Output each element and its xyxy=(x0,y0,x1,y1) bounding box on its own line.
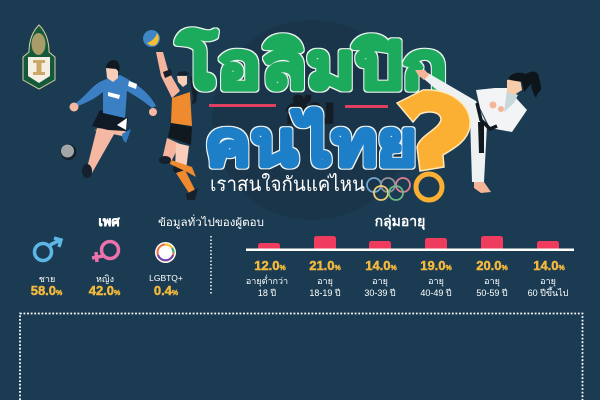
age range labels: 18-19 ปี xyxy=(309,288,341,298)
age value labels: 20.0% xyxy=(476,258,509,273)
heading: respondent info: ข้อมูลทั่วไปของผู้ตอบ xyxy=(158,214,264,229)
age range labels: 18 ปี xyxy=(258,288,276,298)
label: male xyxy=(31,274,63,298)
age range labels: อายุ xyxy=(540,276,556,287)
title line: Olympic: โอลิมปิก xyxy=(176,28,447,102)
age range labels: 50-59 ปี xyxy=(476,288,508,298)
label: female: หญิง xyxy=(96,274,114,284)
age value labels: 19.0% xyxy=(420,258,453,273)
label: LGBTQ: 0.4% xyxy=(154,283,179,298)
subtitle: เราสนใจกันแค่ไหน xyxy=(210,173,365,196)
age value labels: 14.0% xyxy=(533,258,566,273)
title xyxy=(176,28,447,196)
age value labels: 12.0% xyxy=(254,258,287,273)
label: female: 42.0% xyxy=(89,283,121,298)
age range labels: อายุ xyxy=(484,276,500,287)
age range labels: 60 ปีขึ้นไป xyxy=(528,286,569,298)
illustration: volleyball player xyxy=(143,30,198,200)
age value labels: 21.0% xyxy=(309,258,342,273)
age range labels: อายุ xyxy=(428,276,444,287)
illustration: taekwondo kicker xyxy=(415,70,541,193)
icon: LGBTQ ring xyxy=(155,242,176,263)
icon: female xyxy=(92,242,118,262)
title line: Thai people: คนไทย xyxy=(205,108,417,179)
label: LGBTQ xyxy=(149,273,183,298)
age value labels xyxy=(254,258,566,273)
illustration: football player xyxy=(60,60,157,178)
dotted empty panel xyxy=(20,314,582,400)
age range labels: อายุ xyxy=(372,276,388,287)
age range labels: 40-49 ปี xyxy=(420,288,452,298)
label: male: 58.0% xyxy=(31,283,63,298)
olympic rings xyxy=(367,178,410,200)
age range labels xyxy=(246,274,569,298)
age value labels: 14.0% xyxy=(365,258,398,273)
age range labels: อายุต่ำกว่า xyxy=(246,274,288,287)
heading: gender: เพศ xyxy=(98,214,120,229)
question mark xyxy=(397,90,470,200)
label: female xyxy=(89,274,121,298)
label: LGBTQ: LGBTQ+ xyxy=(149,273,183,283)
label: male: ชาย xyxy=(39,274,55,284)
bar chart: age groups xyxy=(246,236,574,251)
age range labels: 30-39 ปี xyxy=(364,288,396,298)
title line: with: กับ xyxy=(286,93,334,129)
age range labels: อายุ xyxy=(317,276,333,287)
icon: male xyxy=(34,238,61,260)
heading: age groups: กลุ่มอายุ xyxy=(375,213,425,230)
logo emblem xyxy=(23,25,55,89)
